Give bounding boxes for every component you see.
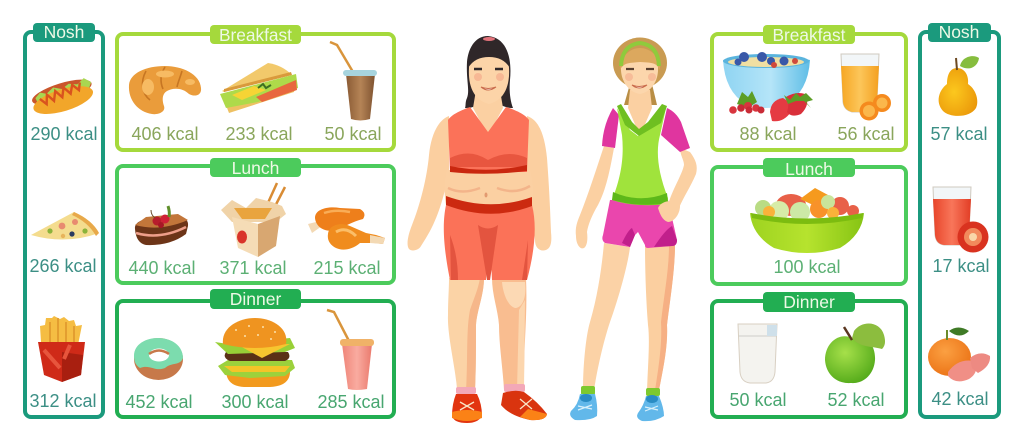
- heading: Lunch: Lunch: [785, 159, 833, 179]
- left leg shade: [466, 278, 484, 390]
- eyes: [626, 68, 654, 70]
- calorie label: 406 kcal: [131, 124, 199, 144]
- panel: right lunch: [712, 158, 906, 284]
- heading: Dinner: Dinner: [783, 292, 835, 312]
- icon: salad bowl: [750, 188, 864, 253]
- icon: sandwich: [220, 63, 298, 113]
- heading: Nosh: Nosh: [44, 22, 84, 42]
- right sleeve: [661, 108, 690, 152]
- panel: left nosh: [25, 22, 103, 417]
- icon: coffee cup with straw: [330, 42, 377, 120]
- right leg shade: [655, 245, 675, 390]
- shorts: [602, 200, 677, 248]
- icon: noodle box with chopsticks: [221, 183, 286, 257]
- fringe: [620, 48, 660, 70]
- neck: [628, 90, 652, 136]
- fringe: [468, 49, 510, 68]
- pigtails: [624, 84, 657, 105]
- right knee highlight: [502, 282, 525, 308]
- heading: Nosh: Nosh: [939, 22, 979, 42]
- calorie label: 300 kcal: [221, 392, 289, 412]
- heading: Lunch: Lunch: [232, 158, 279, 178]
- navel: [484, 192, 488, 198]
- neckline band: [617, 104, 667, 136]
- face: [621, 55, 658, 94]
- icon: croissant: [129, 66, 201, 114]
- left sleeve: [602, 108, 619, 148]
- icon: soda cup with straw: [327, 310, 374, 390]
- eyes: [474, 68, 503, 70]
- right leg highlight: [517, 300, 525, 390]
- calorie label: 17 kcal: [932, 256, 990, 276]
- icon: cereal bowl with berries: [723, 52, 813, 121]
- calorie label: 290 kcal: [30, 124, 98, 144]
- calorie label: 215 kcal: [313, 258, 381, 278]
- crop top shading: [450, 153, 527, 167]
- calorie label: 88 kcal: [739, 124, 797, 144]
- heading: Dinner: [210, 289, 301, 309]
- neck and chest: [473, 90, 503, 136]
- smile: [481, 87, 496, 90]
- smile: [632, 85, 647, 88]
- waistband: [446, 196, 532, 214]
- calorie label: 233 kcal: [225, 124, 293, 144]
- left sock and shoe: [570, 386, 597, 420]
- socks and right shoe: [501, 384, 547, 420]
- heading: Lunch: [210, 158, 301, 178]
- right arm: [527, 116, 551, 251]
- shorts shading: [450, 225, 528, 280]
- cheek right: [648, 73, 656, 81]
- hem band: [612, 192, 668, 205]
- calorie label: 57 kcal: [930, 124, 988, 144]
- left leg: [583, 243, 630, 390]
- panel: left breakfast: [117, 25, 394, 150]
- icon: cake slice: [135, 206, 188, 245]
- icon: pear: [939, 56, 979, 116]
- calorie label: 371 kcal: [219, 258, 287, 278]
- left arm: [576, 146, 614, 248]
- cheeks: [625, 73, 633, 81]
- calorie label: 50 kcal: [729, 390, 787, 410]
- icon: milk glass: [738, 324, 777, 383]
- calorie label: 285 kcal: [317, 392, 385, 412]
- panel: right breakfast: [712, 25, 906, 150]
- belly folds: [448, 186, 530, 192]
- tank top: [612, 108, 668, 205]
- cheeks: [474, 73, 482, 81]
- heading: Breakfast: Breakfast: [772, 25, 846, 45]
- calorie label: 266 kcal: [29, 256, 97, 276]
- socks and left shoe: [452, 387, 482, 423]
- left leg: [448, 278, 484, 390]
- crop top: [448, 107, 529, 172]
- icon: french fries: [38, 316, 85, 382]
- figure: overweight woman: [408, 36, 551, 423]
- right arm on hip: [668, 148, 697, 208]
- calorie label: 42 kcal: [931, 389, 989, 409]
- calorie label: 50 kcal: [324, 124, 382, 144]
- calorie label: 440 kcal: [128, 258, 196, 278]
- heading: Dinner: Dinner: [230, 289, 281, 309]
- calorie label: 452 kcal: [125, 392, 193, 412]
- icon: tangerine: [928, 328, 990, 381]
- icon: chicken legs: [308, 207, 385, 250]
- figure: slim woman: [570, 38, 697, 421]
- icon: pizza slice: [31, 212, 99, 240]
- headband: [621, 43, 659, 66]
- shorts shading: [622, 226, 677, 247]
- shorts: [444, 205, 535, 280]
- heading: Dinner: [763, 292, 855, 312]
- heading: Lunch: [763, 158, 855, 179]
- icon: green apple: [825, 324, 885, 383]
- right sock and shoe: [637, 388, 664, 421]
- hand: [658, 201, 680, 222]
- calorie label: 56 kcal: [837, 124, 895, 144]
- crop top band: [450, 165, 527, 174]
- hair tie: [483, 37, 495, 41]
- face: [469, 52, 509, 104]
- heading: Nosh: [928, 22, 991, 42]
- panel: left dinner: [117, 289, 394, 417]
- icon: hot dog: [29, 75, 97, 120]
- panel: left lunch: [117, 158, 394, 283]
- panel: right dinner: [712, 292, 906, 417]
- left arm: [408, 116, 449, 250]
- right leg: [645, 245, 675, 390]
- calorie label: 52 kcal: [827, 390, 885, 410]
- icon: tomato juice: [933, 187, 988, 252]
- icon: donut: [134, 338, 183, 380]
- right leg: [492, 278, 526, 390]
- hair back: [465, 36, 513, 108]
- heading: Breakfast: Breakfast: [219, 25, 292, 45]
- calorie label: 100 kcal: [773, 257, 841, 277]
- icon: burger: [215, 318, 295, 387]
- hair: [613, 38, 667, 88]
- cheek right: [496, 73, 504, 81]
- panel: right nosh: [920, 22, 999, 417]
- torso: [445, 170, 533, 205]
- heading: Nosh: [33, 22, 95, 42]
- calorie label: 312 kcal: [29, 391, 97, 411]
- icon: orange juice with slices: [841, 54, 891, 120]
